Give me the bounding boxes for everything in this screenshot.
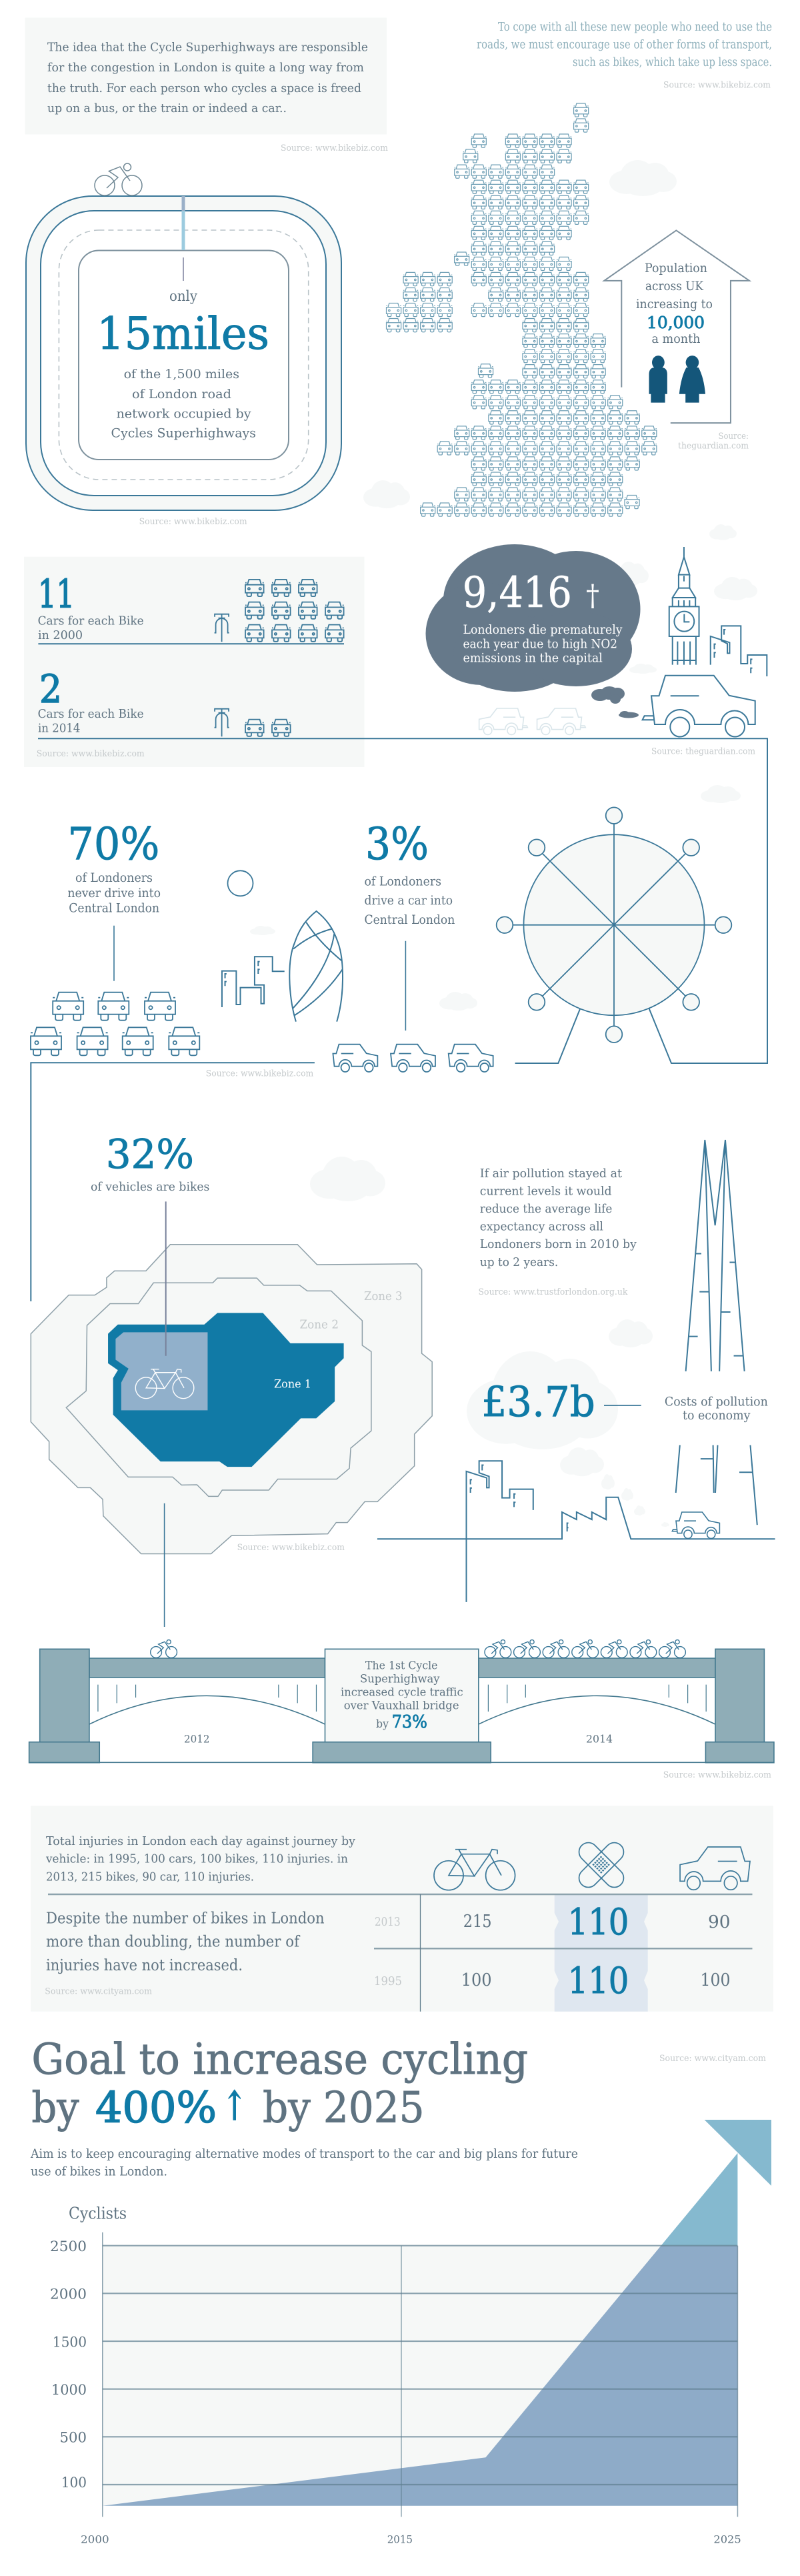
stat: cost of pollution: Costs of pollution — [665, 1395, 768, 1409]
population text: increasing to — [636, 297, 713, 311]
stat: 70 percent: 70% — [67, 818, 159, 870]
stat: 32 percent: 32% — [106, 1131, 194, 1178]
air pollution text: current levels it would — [480, 1185, 612, 1199]
air pollution text: expectancy across all — [480, 1220, 603, 1234]
highlight column — [555, 1894, 648, 2012]
illustration: sun — [228, 870, 253, 896]
row 1995: 100 — [700, 1970, 731, 1990]
quote text: The idea that the Cycle Superhighways are responsible — [47, 40, 368, 55]
icon: car — [680, 1847, 750, 1890]
bridge structure — [29, 1649, 774, 1763]
arrow head — [705, 2120, 771, 2186]
icon: cyclist — [95, 163, 142, 195]
illustration: buildings and Gherkin — [222, 911, 343, 1022]
bridge text: by — [376, 1718, 389, 1731]
icon row: bike and 11 cars — [215, 580, 344, 642]
quote text: for the congestion in London is quite a long way from — [47, 61, 364, 75]
source: transport quote: Source: www.bikebiz.com — [663, 81, 771, 91]
y axis labels: 500 — [60, 2430, 87, 2446]
stat: 11 cars in 2000 — [38, 572, 144, 642]
chart axis title: Cyclists — [69, 2204, 127, 2223]
injuries intro text: Total injuries in London each day against journey by — [46, 1834, 356, 1848]
15 miles text: of London road — [132, 387, 231, 402]
stat: 11 cars in 2000: in 2000 — [38, 628, 83, 642]
icon: bicycle — [434, 1850, 515, 1890]
source: quote: Source: www.bikebiz.com — [281, 143, 388, 153]
population text: Population — [645, 261, 707, 275]
stat: 32 percent — [91, 1131, 209, 1194]
quote text: the truth. For each person who cycles a space is freed — [47, 81, 361, 95]
stat: 2 cars in 2014: in 2014 — [38, 722, 80, 736]
goal description — [30, 2146, 578, 2179]
injuries statement: injuries have not increased. — [46, 1957, 243, 1974]
population text: 10,000 — [647, 313, 705, 332]
bridge text: Superhighway — [360, 1673, 440, 1686]
title: goal heading — [31, 2035, 528, 2133]
icon: plaster — [575, 1839, 627, 1891]
title: goal heading: Goal to increase cycling — [31, 2035, 528, 2084]
icons: seven cars — [31, 993, 199, 1055]
air pollution text — [480, 1167, 637, 1269]
title: goal heading: by — [31, 2084, 79, 2133]
y axis labels: 100 — [61, 2475, 87, 2491]
bridge text — [341, 1660, 463, 1732]
cloud: 9,416 deaths — [425, 544, 640, 692]
connecting line and London Eye legs — [38, 738, 767, 1063]
source: goal: Source: www.cityam.com — [659, 2054, 766, 2064]
deaths text: 9,416 — [463, 568, 572, 618]
injuries statement: more than doubling, the number of — [46, 1933, 300, 1950]
panel: congestion quote — [25, 17, 387, 135]
15 miles text: Cycles Superhighways — [111, 426, 256, 441]
15 miles text: 15miles — [97, 308, 269, 360]
population text: a month — [652, 332, 700, 346]
source: zones: Source: www.bikebiz.com — [237, 1543, 345, 1553]
area below 2500 — [103, 2246, 737, 2506]
panel: injuries table — [31, 1806, 773, 2012]
deaths text: Londoners die prematurely — [463, 622, 623, 637]
stat: 2 cars in 2014: 2 — [39, 666, 62, 712]
row 2013: 2013 — [375, 1915, 401, 1929]
bridge year labels — [184, 1733, 613, 1746]
row 1995: 110 — [568, 1960, 629, 2002]
source: population — [678, 432, 749, 451]
y axis labels — [50, 2238, 87, 2491]
stat: cost of pollution: £3.7b — [481, 1377, 595, 1426]
plot background — [103, 2246, 737, 2506]
injuries statement — [46, 1910, 325, 1974]
goal description: Aim is to keep encouraging alternative modes of transport to the car and big plans for future — [30, 2146, 578, 2161]
row 1995: 1995 — [374, 1974, 402, 1988]
title: goal heading: 400% — [95, 2084, 217, 2133]
zone 2 — [66, 1278, 371, 1496]
source: 70 percent: Source: www.bikebiz.com — [206, 1069, 313, 1079]
source: bridge: Source: www.bikebiz.com — [663, 1770, 771, 1780]
row 2013: 90 — [708, 1912, 731, 1932]
track rings — [26, 196, 341, 510]
y axis labels: 2500 — [50, 2238, 87, 2255]
illustration: polluting car — [643, 676, 755, 736]
stat: 70 percent: of Londoners — [75, 870, 153, 885]
stat: 70 percent: never drive into — [67, 886, 161, 900]
stat: 3 percent: drive a car into — [364, 893, 453, 908]
population text: across UK — [645, 279, 704, 293]
bridge year labels: 2012 — [184, 1733, 209, 1746]
illustration: the Shard — [676, 1140, 757, 1525]
stat: 11 cars in 2000: Cars for each Bike — [38, 614, 144, 628]
background clouds — [250, 160, 757, 1527]
stat: 2 cars in 2014 — [38, 666, 144, 736]
stat: 32 percent: of vehicles are bikes — [91, 1180, 209, 1194]
row 2013: 110 — [568, 1901, 629, 1943]
15 miles text: of the 1,500 miles — [124, 367, 239, 382]
row 1995: 100 — [461, 1970, 492, 1990]
source: injuries: Source: www.cityam.com — [45, 1986, 152, 1996]
15 miles text: only — [169, 288, 197, 304]
bike share highlight — [115, 1332, 207, 1410]
air pollution text: up to 2 years. — [480, 1255, 558, 1269]
injuries intro text: vehicle: in 1995, 100 cars, 100 bikes, 110 injuries. in — [45, 1852, 348, 1866]
house: population — [604, 230, 749, 423]
y axis labels: 1500 — [53, 2334, 87, 2350]
title: goal heading: ↑ — [223, 2083, 247, 2130]
air pollution text: If air pollution stayed at — [480, 1167, 623, 1181]
row 2013: 215 — [463, 1912, 492, 1932]
icon: small car — [672, 1512, 719, 1538]
stat: cost of pollution — [481, 1377, 768, 1426]
air pollution text: Londoners born in 2010 by — [480, 1237, 637, 1251]
source: population: Source: — [719, 432, 749, 442]
goal description: use of bikes in London. — [31, 2164, 167, 2179]
bridge text: 73% — [392, 1712, 427, 1732]
source: track: Source: www.bikebiz.com — [139, 517, 247, 527]
x axis labels: 2025 — [713, 2533, 741, 2546]
15 miles text — [97, 288, 269, 441]
zone labels: Zone 3 — [364, 1289, 403, 1303]
quote text — [47, 40, 368, 115]
source: deaths: Source: theguardian.com — [651, 747, 755, 757]
icon: white bike — [135, 1369, 194, 1399]
deaths text: each year due to high NO2 — [463, 636, 617, 651]
table rules — [48, 1894, 752, 2012]
illustration: London Eye — [497, 807, 731, 1043]
bridge text: increased cycle traffic — [341, 1686, 463, 1700]
row 1995 — [374, 1960, 731, 2002]
injuries intro text: 2013, 215 bikes, 90 car, 110 injuries. — [46, 1870, 254, 1884]
stat: 3 percent: of Londoners — [364, 874, 441, 888]
house outline — [604, 230, 749, 423]
icons: cyclists on bridge — [151, 1640, 685, 1658]
icons: three side cars — [333, 1045, 493, 1072]
x axis labels: 2000 — [81, 2533, 109, 2546]
icon row: bike and 2 cars — [215, 709, 291, 736]
stat: 70 percent: Central London — [69, 901, 159, 916]
15 miles text: network occupied by — [116, 407, 251, 422]
zone labels: Zone 1 — [274, 1377, 311, 1391]
chart: cyclists growth — [50, 2120, 771, 2546]
illustration: skyline and factory — [377, 1461, 775, 1602]
injuries statement: Despite the number of bikes in London — [46, 1910, 325, 1927]
source: cars per bike: Source: www.bikebiz.com — [37, 749, 145, 759]
population text — [636, 261, 713, 346]
x axis labels — [81, 2533, 741, 2546]
zone 1 — [108, 1313, 344, 1467]
bridge text: The 1st Cycle — [365, 1660, 437, 1673]
map: London zones — [31, 1245, 432, 1554]
quote text: up on a bus, or the train or indeed a car.. — [47, 101, 287, 115]
stat: 3 percent — [364, 818, 455, 927]
zone 3 — [31, 1245, 432, 1554]
y axis labels: 1000 — [51, 2382, 87, 2398]
stat: 70 percent — [67, 818, 161, 916]
source: population: theguardian.com — [678, 442, 749, 451]
panel: cars per bike — [24, 557, 364, 767]
zone labels — [274, 1289, 403, 1391]
bridge text: over Vauxhall bridge — [344, 1700, 459, 1713]
title: goal heading: by 2025 — [263, 2084, 425, 2133]
panel: 15 miles track — [26, 163, 341, 510]
source: air pollution: Source: www.trustforlondon.org.uk — [479, 1287, 628, 1297]
icon: people — [649, 356, 705, 403]
stat: 3 percent: Central London — [364, 912, 455, 927]
exhaust smoke — [591, 686, 639, 718]
air pollution text: reduce the average life — [480, 1202, 612, 1216]
x axis labels: 2015 — [387, 2533, 413, 2546]
light cars — [479, 708, 585, 734]
row 2013 — [375, 1901, 731, 1943]
deaths text: † — [586, 579, 599, 613]
UK map of cars — [387, 103, 657, 516]
injuries intro text — [45, 1834, 356, 1884]
zone labels: Zone 2 — [300, 1318, 339, 1332]
deaths text — [463, 568, 623, 666]
grid lines — [103, 2232, 737, 2517]
stat: cost of pollution: to economy — [683, 1409, 751, 1423]
stat: 11 cars in 2000: 11 — [38, 572, 75, 617]
area above 2500 — [661, 2153, 737, 2246]
bridge year labels: 2014 — [586, 1733, 613, 1746]
y axis labels: 2000 — [50, 2287, 87, 2303]
illustration: Vauxhall bridge — [29, 1640, 774, 1763]
illustration: Big Ben and buildings — [669, 547, 767, 676]
stat: 2 cars in 2014: Cars for each Bike — [38, 707, 144, 721]
transport quote — [477, 21, 772, 69]
deaths text: emissions in the capital — [463, 651, 603, 666]
stat: 3 percent: 3% — [365, 818, 429, 870]
